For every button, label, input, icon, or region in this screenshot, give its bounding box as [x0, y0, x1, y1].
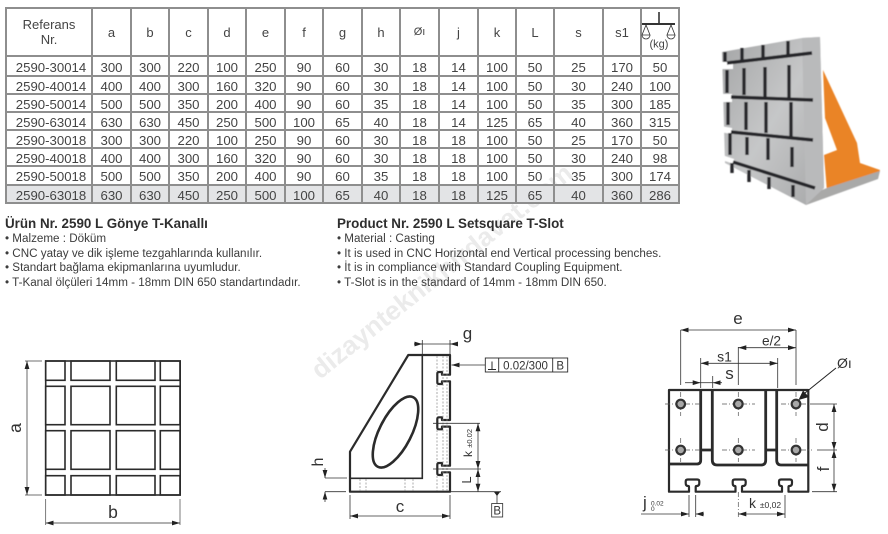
specification table: 630: [100, 188, 122, 202]
specification table: 300: [611, 169, 633, 184]
specification table: 50: [653, 132, 667, 148]
specification table: 65: [335, 188, 350, 202]
specification table: 300: [611, 96, 633, 112]
specification table: 30: [374, 132, 388, 148]
diagram: front view with dimensions a and b: a: [5, 423, 25, 433]
specification table: 100: [486, 78, 508, 94]
diagram: top view with bolts, T-slots and dimensions e, s, s1, d, f, j, k: e/2: [762, 334, 781, 348]
specification table: 2590-30018: [16, 132, 86, 148]
specification table: 40: [571, 188, 586, 202]
specification table: 2590-30014: [16, 60, 86, 74]
specification table: 30: [571, 150, 586, 166]
specification table: 125: [486, 188, 508, 202]
specification table: Øı: [414, 26, 425, 38]
diagram: top view with bolts, T-slots and dimensions e, s, s1, d, f, j, k: Øı: [837, 355, 852, 371]
diagram: top view with bolts, T-slots and dimensions e, s, s1, d, f, j, k: d: [813, 422, 832, 432]
specification table: 320: [254, 150, 276, 166]
specification table: 14: [451, 96, 466, 112]
specification table: 60: [335, 78, 350, 94]
specification table: Referans: [23, 17, 75, 32]
specification table: 40: [571, 114, 586, 130]
diagram: top view with bolts, T-slots and dimensions e, s, s1, d, f, j, k: k ±0,02: [749, 495, 781, 511]
specification table: 40: [374, 114, 388, 130]
specification table: 2590-63018: [16, 188, 86, 202]
diagram: side view with dimensions c, g, h, k, L and perpendicularity tolerance: c: [396, 497, 405, 516]
specification table: [5, 7, 680, 204]
specification table: 18: [451, 188, 466, 202]
specification table: 50: [528, 169, 542, 184]
specification table: 125: [486, 114, 508, 130]
specification table: 18: [412, 150, 427, 166]
specification table: 300: [177, 78, 200, 94]
specification table: 220: [177, 132, 200, 148]
text block: English product notes: [337, 216, 661, 289]
specification table: a: [108, 24, 115, 40]
specification table: 170: [611, 60, 633, 74]
specification table: 400: [100, 78, 122, 94]
diagram: top view with bolts, T-slots and dimensions e, s, s1, d, f, j, k: 0.02: [651, 500, 664, 508]
icon: weight scale (kg): (kg): [650, 38, 668, 50]
specification table: 2590-40014: [16, 78, 86, 94]
diagram: side view with dimensions c, g, h, k, L and perpendicularity tolerance: B: [556, 360, 564, 372]
specification table: 630: [139, 188, 161, 202]
specification table: 98: [653, 150, 667, 166]
specification table: 240: [611, 78, 633, 94]
specification table: 14: [451, 78, 466, 94]
specification table: 30: [374, 78, 388, 94]
specification table: 320: [254, 78, 276, 94]
diagram: top view with bolts, T-slots and dimensions e, s, s1, d, f, j, k: s: [725, 364, 734, 383]
specification table: 65: [528, 114, 542, 130]
specification table: 14: [451, 60, 466, 74]
specification table: 220: [177, 60, 200, 74]
diagram: front view with dimensions a and b: b: [108, 502, 118, 522]
specification table: 30: [571, 78, 586, 94]
specification table: 300: [100, 132, 122, 148]
specification table: 100: [293, 188, 315, 202]
specification table: 400: [254, 96, 276, 112]
specification table: 65: [528, 188, 542, 202]
specification table: 500: [100, 169, 122, 184]
specification table: 90: [297, 78, 311, 94]
specification table: 500: [139, 169, 161, 184]
specification table: 14: [451, 114, 466, 130]
specification table: 2590-50018: [16, 169, 86, 184]
specification table: s: [575, 24, 582, 40]
specification table: 18: [451, 169, 466, 184]
text block: Turkish product notes: • T-Kanal ölçüleri 14mm - 18mm DIN 650 standartındadır.: [5, 276, 301, 289]
specification table: 400: [254, 169, 276, 184]
specification table: 250: [254, 60, 276, 74]
specification table: 65: [335, 114, 350, 130]
text block: Turkish product notes: • Standart bağlama ekipmanlarına uyumludur.: [5, 261, 241, 274]
specification table: 315: [649, 114, 671, 130]
specification table: 286: [649, 188, 671, 202]
specification table: 360: [611, 114, 633, 130]
text block: Turkish product notes: • CNC yatay ve dik işleme tezgahlarında kullanılır.: [5, 247, 262, 260]
specification table: 18: [412, 114, 427, 130]
specification table: h: [377, 24, 385, 40]
specification table: 30: [374, 60, 388, 74]
specification table: 60: [335, 150, 350, 166]
specification table: 300: [139, 60, 161, 74]
specification table: 18: [412, 60, 427, 74]
specification table: e: [262, 24, 269, 40]
specification table: 100: [486, 132, 508, 148]
specification table: 25: [571, 132, 586, 148]
specification table: j: [457, 24, 460, 40]
text block: English product notes: • İt is in compliance with Standard Coupling Equipment.: [337, 261, 623, 274]
specification table: 100: [486, 169, 508, 184]
diagram: side view with dimensions c, g, h, k, L and perpendicularity tolerance: L: [459, 476, 474, 484]
specification table: 35: [571, 96, 586, 112]
specification table: 100: [649, 78, 671, 94]
specification table: 250: [216, 188, 238, 202]
specification table: g: [339, 24, 346, 40]
specification table: k: [494, 24, 500, 40]
specification table: 50: [653, 60, 667, 74]
specification table: 200: [216, 169, 238, 184]
specification table: 250: [216, 114, 238, 130]
diagram: side view with dimensions c, g, h, k, L and perpendicularity tolerance: 0.02/300: [503, 360, 548, 372]
specification table: 360: [611, 188, 633, 202]
specification table: b: [146, 24, 154, 40]
text block: Turkish product notes: Ürün Nr. 2590 L Gönye T-Kanallı: [5, 216, 208, 231]
text block: Turkish product notes: • Malzeme : Döküm: [5, 232, 106, 245]
specification table: 50: [528, 132, 542, 148]
specification table: 160: [216, 78, 238, 94]
diagram: top view with bolts, T-slots and dimensions e, s, s1, d, f, j, k: f: [814, 466, 833, 471]
text block: English product notes: Product Nr. 2590 L Setsquare T-Slot: [337, 216, 564, 231]
specification table: 60: [335, 60, 350, 74]
specification table: 60: [335, 132, 350, 148]
specification table: 100: [486, 150, 508, 166]
specification table: 400: [100, 150, 122, 166]
specification table: Nr.: [41, 32, 57, 47]
specification table: 50: [528, 96, 542, 112]
diagram: side view with dimensions c, g, h, k, L and perpendicularity tolerance: B: [493, 506, 501, 518]
specification table: 240: [611, 150, 633, 166]
specification table: d: [223, 24, 231, 40]
specification table: 170: [611, 132, 633, 148]
specification table: 50: [528, 78, 542, 94]
diagram: top view with bolts, T-slots and dimensions e, s, s1, d, f, j, k: 0: [651, 506, 655, 513]
specification table: c: [185, 24, 192, 40]
specification table: 2590-40018: [16, 150, 86, 166]
text block: English product notes: • It is used in CNC Horizontal end Vertical processing benches.: [337, 247, 661, 260]
text block: English product notes: • T-Slot is in the standard of 14mm - 18mm DIN 650.: [337, 276, 607, 289]
specification table: 25: [571, 60, 586, 74]
specification table: 100: [216, 132, 238, 148]
text block: Turkish product notes: [5, 216, 301, 289]
specification table: 100: [216, 60, 238, 74]
specification table: 90: [297, 132, 311, 148]
specification table: 18: [412, 96, 427, 112]
diagram: side view with dimensions c, g, h, k, L and perpendicularity tolerance: h: [310, 458, 327, 466]
specification table: 18: [451, 132, 466, 148]
specification table: 60: [335, 169, 350, 184]
specification table: 18: [412, 188, 427, 202]
specification table: 18: [412, 132, 427, 148]
diagram: side view with dimensions c, g, h, k, L and perpendicularity tolerance: k ±0.02: [461, 429, 475, 457]
specification table: 500: [254, 114, 276, 130]
specification table: 90: [297, 60, 311, 74]
specification table: 40: [374, 188, 388, 202]
diagram: top view with bolts, T-slots and dimensions e, s, s1, d, f, j, k: j: [642, 493, 647, 512]
specification table: 500: [254, 188, 276, 202]
text block: English product notes: • Material : Casting: [337, 232, 435, 245]
specification table: 300: [139, 132, 161, 148]
specification table: 50: [528, 60, 542, 74]
diagram: top view with bolts, T-slots and dimensions e, s, s1, d, f, j, k: s1: [717, 348, 732, 364]
specification table: 500: [139, 96, 161, 112]
diagram: top view with bolts, T-slots and dimensions e, s, s1, d, f, j, k: e: [733, 309, 743, 328]
specification table: 450: [177, 188, 200, 202]
specification table: 18: [412, 78, 427, 94]
specification table: 100: [486, 60, 508, 74]
specification table: 35: [374, 96, 388, 112]
specification table: 2590-50014: [16, 96, 86, 112]
specification table: 630: [139, 114, 161, 130]
specification table: f: [302, 24, 306, 40]
specification table: 35: [374, 169, 388, 184]
specification table: 200: [216, 96, 238, 112]
specification table: 60: [335, 96, 350, 112]
specification table: 450: [177, 114, 200, 130]
specification table: 160: [216, 150, 238, 166]
specification table: 630: [100, 114, 122, 130]
specification table: 400: [139, 78, 161, 94]
specification table: 500: [100, 96, 122, 112]
specification table: 300: [177, 150, 200, 166]
specification table: 30: [374, 150, 388, 166]
specification table: 50: [528, 150, 542, 166]
specification table: 2590-63014: [16, 114, 86, 130]
specification table: 174: [649, 169, 671, 184]
specification table: 185: [649, 96, 671, 112]
specification table: 400: [139, 150, 161, 166]
specification table: s1: [615, 24, 629, 40]
specification table: 350: [177, 96, 200, 112]
specification table: 100: [293, 114, 315, 130]
specification table: 350: [177, 169, 200, 184]
specification table: 300: [100, 60, 122, 74]
specification table: 90: [297, 169, 311, 184]
specification table: 90: [297, 150, 311, 166]
specification table: 250: [254, 132, 276, 148]
watermark: dizaynteknikhirdavat.com: [305, 157, 578, 385]
diagram: side view with dimensions c, g, h, k, L and perpendicularity tolerance: g: [463, 324, 472, 343]
specification table: 18: [412, 169, 427, 184]
specification table: 90: [297, 96, 311, 112]
specification table: 100: [486, 96, 508, 112]
specification table: 18: [451, 150, 466, 166]
specification table: 35: [571, 169, 586, 184]
specification table: L: [531, 24, 539, 40]
